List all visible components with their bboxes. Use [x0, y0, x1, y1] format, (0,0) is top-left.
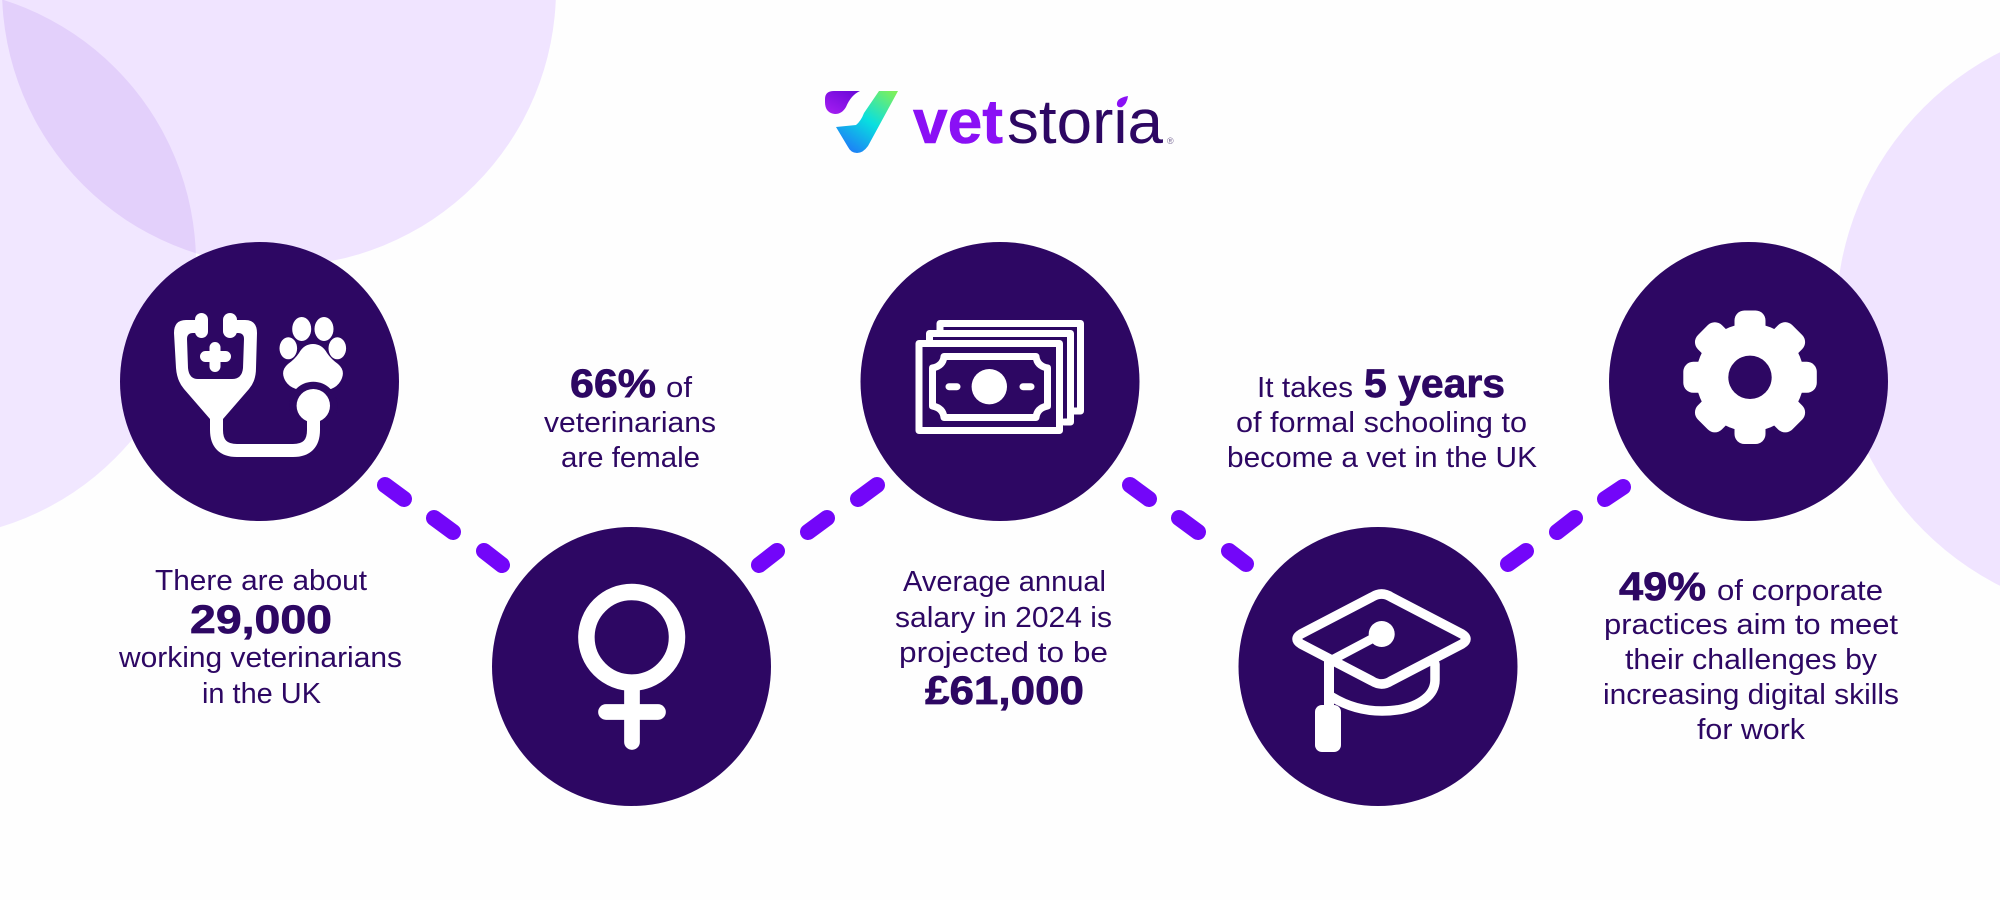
background: left circle — [0, 0, 196, 539]
icon: female symbol — [586, 592, 677, 742]
text: 66% female: veterinarians — [544, 407, 716, 439]
text: 49% corporate practices — [1603, 565, 1899, 746]
text: 66% female: 66% — [570, 362, 656, 406]
text: 66% female: of — [666, 372, 693, 404]
background: top-left circle — [2, 0, 556, 266]
text: 5 years schooling: It takes — [1257, 372, 1353, 404]
text: 66% female — [544, 362, 716, 474]
panel: education circle with graduation cap icon — [1238, 527, 1518, 806]
icon: graduation cap — [1297, 594, 1466, 752]
logo registered mark: ® — [1167, 136, 1174, 146]
text: average salary: salary in 2024 is — [895, 602, 1112, 634]
text: 49% corporate practices: their challenges by — [1625, 644, 1878, 676]
text: 49% corporate practices: 49% — [1619, 565, 1706, 609]
text: average salary: £61,000 — [925, 669, 1084, 713]
text: 49% corporate practices: for work — [1697, 714, 1806, 746]
panel: digital skills circle with gear icon — [1609, 242, 1888, 521]
panel: female circle with icon — [492, 527, 771, 806]
logo mark: purple drop — [825, 91, 860, 114]
background: right circle — [1836, 20, 2000, 618]
logo mark: gradient check — [836, 91, 898, 153]
text: average salary: projected to be — [899, 637, 1108, 669]
text: 29,000 veterinarians: There are about — [155, 565, 367, 597]
logo word: storia: storia — [1007, 88, 1164, 157]
connector: circle 2 to 3 — [759, 485, 877, 565]
text: average salary: Average annual — [903, 566, 1106, 598]
text: 5 years schooling: become a vet in the UK — [1227, 442, 1538, 474]
text: 29,000 veterinarians: 29,000 — [190, 598, 332, 642]
text: 49% corporate practices: increasing digital skills — [1603, 679, 1899, 711]
connector: circle 3 to 4 — [1130, 485, 1246, 564]
text: 29,000 veterinarians: working veterinarians — [118, 642, 402, 674]
connector: circle 4 to 5 — [1508, 487, 1623, 564]
text: 5 years schooling — [1227, 362, 1538, 474]
icon: gear — [1683, 310, 1817, 444]
panel: salary circle with banknotes icon — [860, 242, 1140, 521]
connector: circle 1 to 2 — [385, 485, 502, 565]
text: 66% female: are female — [561, 442, 700, 474]
text: 5 years schooling: of formal schooling to — [1236, 407, 1527, 439]
icon: stethoscope and paw — [174, 313, 346, 450]
logo word: vet: vet — [913, 88, 1003, 157]
logo i dot mask — [1108, 90, 1132, 110]
text: 49% corporate practices: practices aim to meet — [1604, 609, 1898, 641]
logo i dot — [1117, 96, 1128, 107]
text: 29,000 veterinarians — [118, 565, 402, 710]
text: average salary — [895, 566, 1112, 713]
icon: banknotes — [919, 324, 1080, 430]
logo: vetstoria — [825, 88, 1174, 157]
background: overlap leaf — [2, 0, 196, 253]
panel: vets circle with stethoscope and paw icon — [120, 242, 399, 521]
text: 29,000 veterinarians: in the UK — [202, 678, 322, 710]
text: 49% corporate practices: of corporate — [1717, 575, 1883, 607]
text: 5 years schooling: 5 years — [1364, 362, 1505, 406]
